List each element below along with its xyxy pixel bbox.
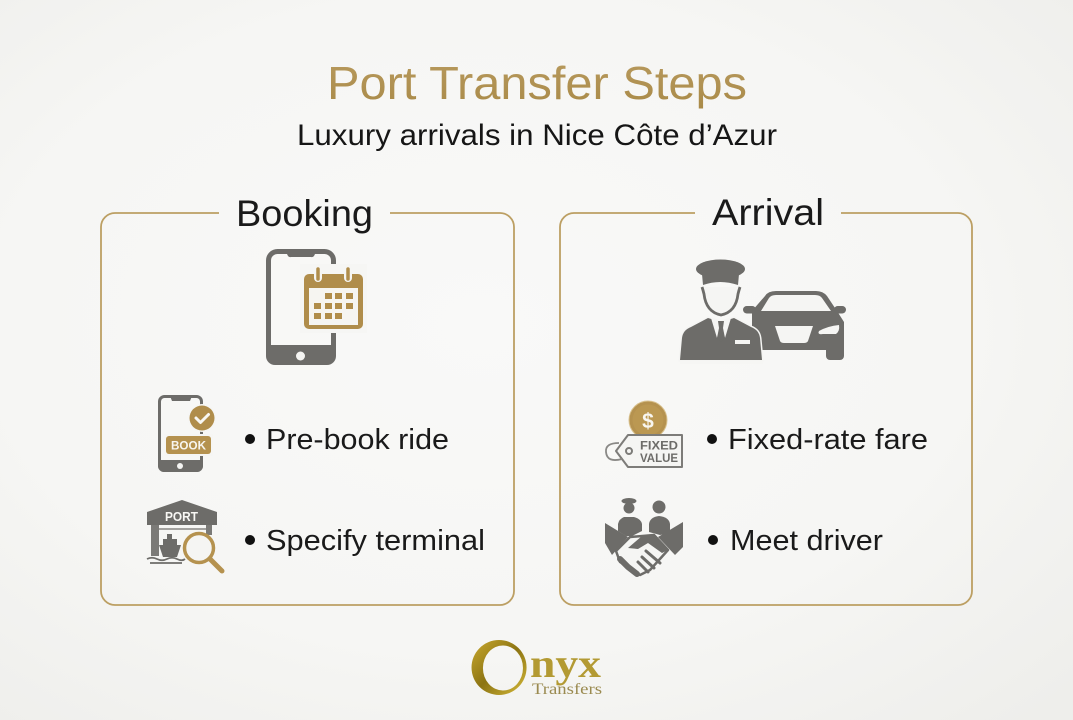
logo: Onyx Transfers	[472, 640, 602, 698]
subtitle: Luxury arrivals in Nice Côte d’Azur	[297, 119, 777, 152]
icon: chauffeur and car	[680, 260, 846, 364]
icon: fixed value tag and coin: FIXED	[640, 438, 678, 452]
icon: port search	[147, 500, 222, 571]
title: Port Transfer Steps	[327, 57, 747, 109]
panel: booking	[101, 193, 514, 605]
logo ring	[472, 640, 527, 695]
panel: arrival	[560, 192, 972, 605]
icon: fixed value tag and coin	[606, 401, 682, 467]
bullet: fixed-rate fare: Fixed-rate fare	[728, 424, 928, 456]
icon: book ride phone	[158, 396, 216, 472]
icon: fixed value tag and coin: VALUE	[640, 451, 678, 465]
icon: port search: PORT	[165, 510, 198, 524]
icon: meeting handshake	[605, 498, 683, 575]
icon: fixed value tag and coin: $	[642, 410, 654, 433]
bullet: meet driver: Meet driver	[730, 525, 883, 557]
heading: arrival: Arrival	[712, 192, 824, 233]
icon: phone with calendar	[266, 250, 367, 365]
logo tagline: Transfers	[532, 681, 602, 698]
bullet: specify terminal: Specify terminal	[266, 525, 485, 557]
heading: booking: Booking	[236, 193, 373, 234]
icon: book ride phone: BOOK	[171, 438, 206, 452]
bullet: pre-book ride: Pre-book ride	[266, 424, 449, 456]
logo wordmark: nyx	[530, 641, 601, 686]
